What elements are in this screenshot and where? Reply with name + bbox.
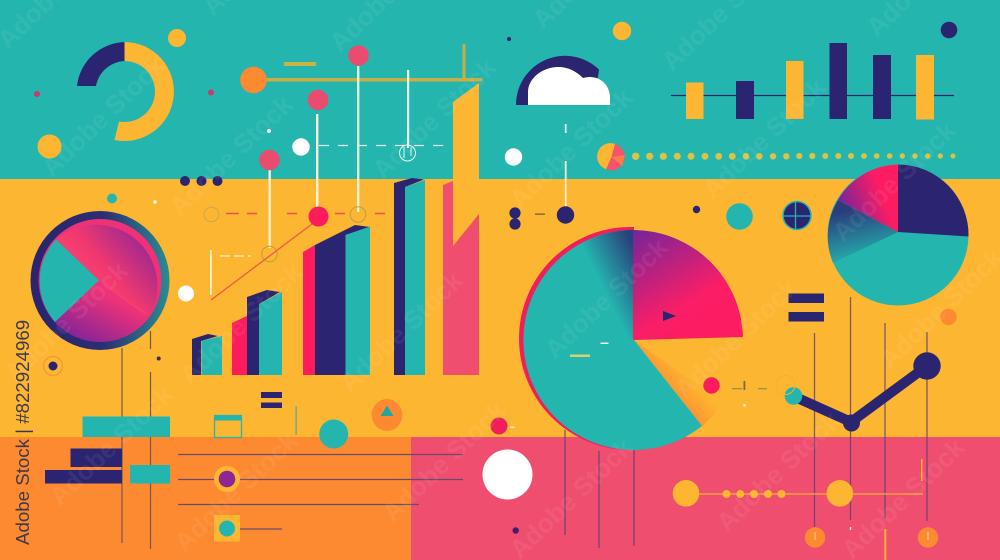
cloud icon xyxy=(516,56,610,105)
background: orange block xyxy=(0,437,411,560)
watermark: Adobe Stock xyxy=(668,272,804,404)
side credit text: Adobe Stock | #822924969 xyxy=(12,320,33,545)
node and line diagram xyxy=(204,44,482,300)
ascending bar chart xyxy=(192,83,479,375)
watermark: Adobe Stock xyxy=(35,50,171,182)
left vertical lines xyxy=(122,331,150,549)
watermark: Adobe Stock xyxy=(538,232,674,364)
watermark: Adobe Stock xyxy=(376,395,512,527)
bottom node timeline xyxy=(673,459,938,560)
watermark: Adobe Stock xyxy=(696,72,832,204)
donut chart xyxy=(77,42,174,141)
thin tick xyxy=(296,406,297,435)
watermark: Adobe Stock xyxy=(826,115,962,247)
dotted line xyxy=(632,153,956,160)
watermark: Adobe Stock xyxy=(43,379,179,511)
horizontal block chart xyxy=(45,416,170,484)
small marks beside line chart xyxy=(703,376,795,406)
watermark: Adobe Stock xyxy=(503,82,639,214)
small dots near pink block xyxy=(490,418,519,534)
top bar chart xyxy=(671,43,954,120)
background: pink block xyxy=(411,437,1000,560)
pie: teal slice xyxy=(523,230,702,450)
orange circle with triangle xyxy=(372,399,402,431)
pie: navy triangle xyxy=(663,311,676,321)
small icons: yellow band right xyxy=(693,202,957,325)
teal dot in yellow square xyxy=(214,515,240,542)
watermark: Adobe Stock xyxy=(366,52,502,184)
purple dot in yellow ring xyxy=(214,466,240,492)
drop line with navy node xyxy=(509,124,574,230)
large white circle xyxy=(482,450,532,500)
line chart with nodes xyxy=(785,352,941,432)
large pie chart xyxy=(519,227,743,450)
bar group 4 xyxy=(394,178,425,375)
bar group 1 xyxy=(192,334,222,375)
bar group 3 xyxy=(303,225,370,375)
watermark: Adobe Stock xyxy=(710,405,846,537)
background: teal band xyxy=(0,0,1000,179)
equals icon right xyxy=(788,294,824,322)
scattered dots: upper right xyxy=(505,22,957,166)
bar group 5 xyxy=(443,83,479,375)
pie: small dashes xyxy=(570,342,608,357)
background: yellow band xyxy=(0,179,1000,437)
horizontal rule lines xyxy=(178,454,463,529)
watermark: Adobe Stock xyxy=(163,89,299,221)
vertical lines under pies xyxy=(565,297,927,548)
watermark: Adobe Stock xyxy=(168,425,304,557)
watermark: Adobe Stock xyxy=(0,255,134,387)
mini pie icon xyxy=(597,143,625,170)
pie: yellow gradient wedge xyxy=(634,340,723,426)
pie: dark gradient sector xyxy=(545,230,634,340)
three navy dots xyxy=(180,176,222,186)
watermark: Adobe Stock xyxy=(173,257,309,389)
watermark: Adobe Stock xyxy=(333,265,469,397)
pie: magenta slice xyxy=(633,230,743,340)
teal circle xyxy=(319,420,348,448)
target icon xyxy=(44,356,161,376)
window icon xyxy=(214,415,242,438)
scattered dots: upper left xyxy=(34,29,271,302)
equals icon left xyxy=(261,392,282,408)
left pie chart xyxy=(30,211,170,350)
right pie chart xyxy=(828,164,969,306)
pie: red crescent xyxy=(519,227,634,450)
bar group 2 xyxy=(232,290,282,375)
